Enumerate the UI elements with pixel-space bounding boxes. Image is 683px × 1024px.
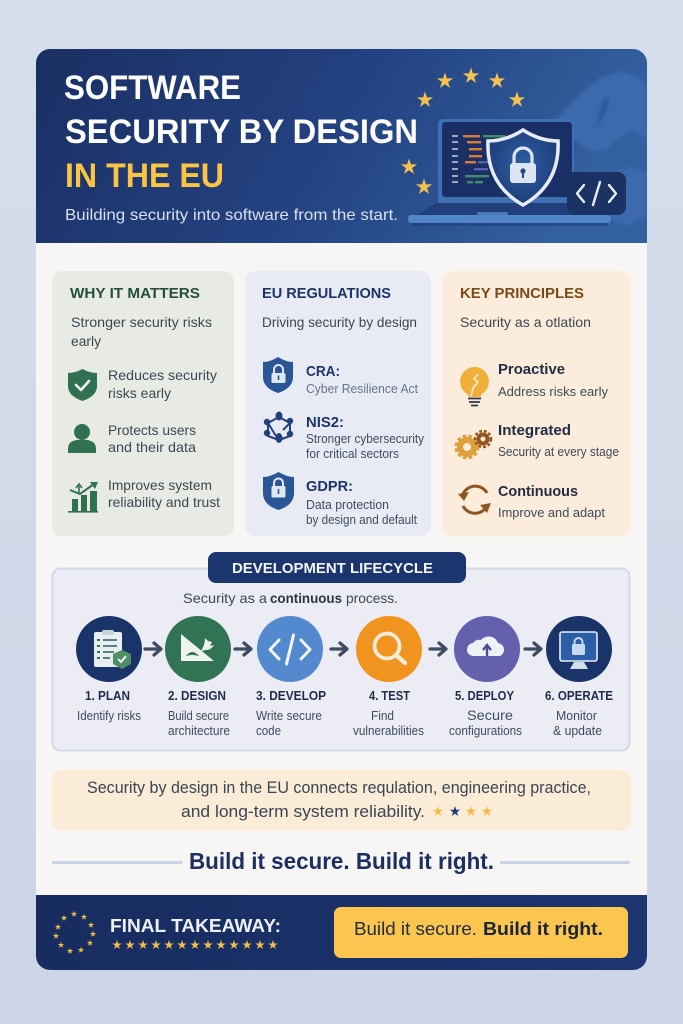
step 5: deploy: Secure <box>467 707 513 723</box>
text: GDPR <box>306 478 417 527</box>
step 6: operate <box>545 616 613 738</box>
text: NIS2: for critical sectors <box>306 447 399 461</box>
icon: laptop with shield <box>408 119 626 226</box>
text: GDPR: by design and default <box>306 513 417 527</box>
heading: WHY IT MATTERS <box>70 285 200 302</box>
icon: continuous cycle <box>458 486 491 513</box>
arrow <box>145 643 161 655</box>
text: CRA: CRA: <box>306 363 340 380</box>
step 3: develop: code <box>256 724 281 738</box>
step 2: design: 2. DESIGN <box>168 688 226 703</box>
intro text: Stronger security risks <box>71 314 212 330</box>
star row <box>112 940 278 949</box>
text: NIS2: NIS2: <box>306 414 344 431</box>
icon: green shield check <box>68 369 97 401</box>
title <box>64 69 418 195</box>
step 3: develop: 3. DEVELOP <box>256 688 326 703</box>
heading: EU REGULATIONS <box>262 285 391 302</box>
text: proactive: Proactive <box>498 361 565 378</box>
text: proactive: Address risks early <box>498 384 608 399</box>
step 4: test: vulnerabilities <box>353 724 424 738</box>
intro text <box>71 314 212 349</box>
arrow <box>235 643 251 655</box>
step 5: deploy: 5. DEPLOY <box>455 688 514 703</box>
title: SOFTWARE <box>64 69 241 107</box>
map of Europe <box>556 71 647 226</box>
icon: EU stars arc <box>401 68 525 194</box>
takeaway button: Build it secure. <box>354 919 477 939</box>
takeaway button <box>334 907 628 958</box>
icon: gears <box>456 431 491 458</box>
tagline: Build it secure. Build it right. <box>189 848 494 874</box>
text: continuous <box>498 483 605 520</box>
text: GDPR: Data protection <box>306 498 389 512</box>
icon: NIS2 network <box>264 412 293 443</box>
step 4: test: 4. TEST <box>369 688 410 703</box>
arrow <box>430 643 446 655</box>
subtitle: Building security into software from the start. <box>65 207 398 224</box>
panel: key principles <box>442 271 631 536</box>
callout: summary note <box>52 770 631 831</box>
text: GDPR: GDPR: <box>306 478 353 495</box>
arrow <box>331 643 347 655</box>
step 1: plan: Identify risks <box>77 709 141 723</box>
icon: EU star ring <box>53 911 96 954</box>
title: SECURITY BY DESIGN <box>65 113 418 151</box>
step 6: operate: & update <box>553 724 602 738</box>
step 1: plan <box>76 616 142 723</box>
panel: why it matters <box>52 271 234 536</box>
text: continuous: Improve and adapt <box>498 505 605 520</box>
panel: development lifecycle <box>52 552 630 750</box>
lifecycle heading pill: DEVELOPMENT LIFECYCLE <box>232 560 433 577</box>
text: continuous: Continuous <box>498 483 578 500</box>
step 4: test: Find <box>371 709 394 723</box>
text: NIS2: Stronger cybersecurity <box>306 432 425 446</box>
text: improves reliability: reliability and trust <box>108 494 220 510</box>
step 5: deploy: configurations <box>449 723 522 738</box>
text: protects users: and their data <box>108 439 196 455</box>
text: reduces risks: Reduces security <box>108 367 217 383</box>
step 1: plan: 1. PLAN <box>85 688 130 703</box>
heading: KEY PRINCIPLES <box>460 285 584 302</box>
text: integrated: Integrated <box>498 422 571 439</box>
text: CRA: Cyber Resilience Act <box>306 381 418 396</box>
panel: EU regulations <box>245 271 431 536</box>
lifecycle subtitle <box>183 590 398 606</box>
step 3: develop <box>256 616 326 738</box>
icon: growth chart <box>68 482 98 513</box>
text: integrated: Security at every stage <box>498 444 619 459</box>
header banner <box>36 49 647 243</box>
step 5: deploy <box>449 616 522 738</box>
text: reduces risks <box>108 367 217 401</box>
icon: light bulb <box>460 367 489 406</box>
text: NIS2 <box>306 414 425 461</box>
text: protects users: Protects users <box>108 422 196 438</box>
text: integrated <box>498 422 619 459</box>
step 2: design <box>165 616 231 738</box>
footer bar <box>36 895 647 970</box>
lifecycle subtitle: continuous <box>270 590 342 606</box>
intro text: Driving security by design <box>262 314 417 330</box>
step 3: develop: Write secure <box>256 709 322 723</box>
icon: CRA shield <box>263 357 293 393</box>
title: IN THE EU <box>65 157 224 195</box>
tagline <box>52 848 630 874</box>
text: CRA <box>306 363 418 396</box>
takeaway button: Build it right. <box>483 918 603 939</box>
callout: summary note: and long-term system reliability. <box>181 802 425 821</box>
lifecycle subtitle: Security as a <box>183 590 267 606</box>
callout: summary note: Security by design in the EU connects requlation, engineering practice, <box>87 779 591 797</box>
arrow <box>525 643 541 655</box>
step 2: design: Build secure <box>168 709 229 723</box>
text: protects users <box>108 422 196 455</box>
intro text: Security as a otlation <box>460 314 591 330</box>
step 2: design: architecture <box>168 724 230 738</box>
text: proactive <box>498 361 608 399</box>
text: improves reliability: Improves system <box>108 477 212 493</box>
step 6: operate: Monitor <box>556 709 597 723</box>
icon: GDPR shield <box>263 472 294 510</box>
text: improves reliability <box>108 477 220 510</box>
intro text: early <box>71 333 101 349</box>
step 6: operate: 6. OPERATE <box>545 688 613 703</box>
icon: person <box>68 424 96 453</box>
text: reduces risks: risks early <box>108 385 171 401</box>
lifecycle subtitle: process. <box>346 590 398 606</box>
lifecycle heading pill <box>208 552 466 583</box>
step 4: test <box>353 616 424 738</box>
footer label: FINAL TAKEAWAY: <box>110 916 281 936</box>
